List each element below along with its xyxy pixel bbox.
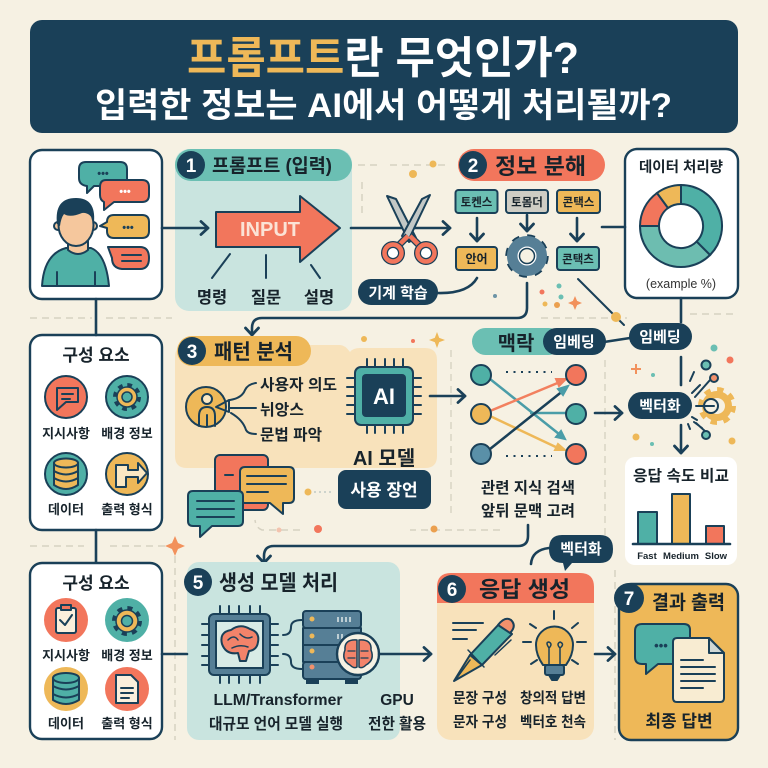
response captions: 창의적 답변	[520, 690, 586, 707]
icon: background gear	[106, 376, 148, 418]
token boxes: 콘택츠	[562, 253, 594, 266]
decorative dashes	[30, 165, 738, 740]
pill: vectorization: 벡터화	[639, 398, 681, 415]
pill: machine learning	[358, 278, 477, 305]
icon: server rack	[283, 611, 361, 684]
arrow: AI chip to network	[430, 395, 465, 397]
donut title: 데이터 처리량	[639, 159, 723, 176]
card labels: 출력 형식	[101, 502, 153, 517]
analysis list: 사용자 의도	[260, 376, 337, 394]
card labels: 데이터	[48, 716, 84, 731]
model caption	[209, 692, 343, 733]
network caption: 관련 지식 검색	[481, 479, 575, 497]
icon: output format	[106, 453, 148, 495]
card labels: 출력 형식	[101, 716, 153, 731]
icon: lightbulb	[523, 611, 586, 680]
decorative dots	[165, 160, 736, 556]
panel: data throughput donut	[625, 149, 738, 298]
pill: context and embedding: 임베딩	[553, 334, 595, 351]
step heading: 결과 출력	[652, 592, 725, 614]
analysis list: 뉘앙스	[260, 401, 304, 419]
header pill	[175, 149, 352, 181]
down arrows	[477, 215, 577, 241]
header band	[437, 573, 594, 603]
icon: AI chip: AI	[373, 384, 395, 409]
chart: response speed	[625, 457, 737, 565]
connectors: left cards	[95, 299, 97, 563]
icon: chat and document	[635, 624, 724, 702]
connector: gear to donut	[602, 226, 625, 228]
icon: chat bubbles	[188, 455, 294, 537]
icon: brain chip	[202, 606, 278, 683]
arrow: vectorization to speed chart	[680, 425, 682, 453]
step heading	[184, 568, 338, 596]
panel: step 7 result	[614, 583, 738, 740]
token boxes: 콘택스	[563, 196, 595, 209]
donut caption: (example %)	[646, 277, 716, 291]
panel: step 1 prompt	[175, 149, 352, 311]
GPU caption: 전한 활용	[368, 715, 426, 733]
icon: yellow speech bubble	[100, 215, 149, 238]
model caption: LLM/Transformer	[214, 692, 342, 709]
arrow: network to generation	[264, 525, 528, 563]
header pill: 프롬프트 (입력)	[212, 155, 332, 177]
result caption: 최종 답변	[645, 712, 713, 731]
card labels: 지시사항	[42, 648, 90, 663]
header pill: 정보 분해	[495, 154, 586, 179]
chart title: 응답 속도 비교	[633, 467, 729, 485]
box: usage scenario: 사용 장언	[350, 481, 418, 500]
response captions: 벡터호 천속	[520, 714, 586, 731]
card title: 구성 요소	[62, 346, 130, 365]
callout: vectorization: 벡터화	[560, 541, 602, 558]
icon: user intent	[186, 383, 256, 434]
icon: data	[45, 453, 87, 495]
card labels: 지시사항	[42, 426, 90, 441]
response captions: 문장 구성	[453, 690, 507, 707]
analysis list: 문법 파악	[260, 426, 322, 444]
arrow: prompt to split	[351, 227, 450, 229]
card labels: 배경 정보	[101, 648, 153, 663]
icon: coral speech bubble	[100, 180, 149, 210]
token boxes: 토몸더	[511, 196, 543, 209]
icon: vector gear	[688, 360, 732, 439]
icon: yellow speech bubble: •••	[122, 222, 134, 234]
panel: step 6 response generation	[437, 573, 594, 740]
panel: user card	[30, 150, 162, 299]
arrow: network to vectorization	[595, 412, 622, 414]
arrow: response to result	[595, 653, 615, 655]
card labels	[42, 426, 153, 517]
card title: 구성 요소	[62, 574, 130, 593]
icon: teal speech bubble: •••	[97, 168, 109, 180]
network links	[490, 379, 568, 450]
AI model label: AI 모델	[353, 447, 415, 470]
panel: components card 1	[30, 335, 162, 530]
icon: coral speech bubble: •••	[119, 186, 131, 198]
box: usage scenario	[338, 470, 431, 509]
pill: embedding right	[629, 323, 692, 350]
title banner	[30, 20, 738, 133]
card labels: 배경 정보	[101, 426, 153, 441]
panel: step 2 split	[456, 149, 605, 274]
pill: embedding right: 임베딩	[639, 329, 681, 346]
response captions: 문자 구성	[453, 714, 507, 731]
callout: vectorization	[531, 535, 613, 571]
panel: components card 2	[30, 563, 162, 739]
icon: scissors	[384, 195, 434, 262]
icon: clipboard	[44, 598, 88, 642]
token boxes: 안어	[465, 252, 488, 266]
icon: instructions	[45, 376, 87, 418]
icon: database	[44, 667, 88, 711]
arrow: generation to response	[379, 653, 431, 655]
step heading: 7	[624, 589, 634, 610]
icon: AI chip	[347, 359, 421, 433]
header band: 6	[447, 580, 457, 601]
chart: neural network: 앞뒤 문맥 고려	[481, 502, 575, 520]
connector: donut to embedding	[680, 298, 682, 322]
input branches: 설명	[304, 288, 334, 307]
network nodes	[471, 365, 586, 464]
title line 2: 입력한 정보는 AI에서 어떻게 처리될까?	[95, 87, 672, 125]
connector: components to generation	[162, 653, 187, 655]
arrow: user to prompt	[162, 227, 208, 229]
header pill	[458, 149, 605, 181]
connector: context to embedding	[578, 279, 624, 325]
title line 1: 프롬프트란 무엇인가?	[187, 34, 579, 83]
input branches: 질문	[251, 288, 281, 307]
arrow: split to pattern analysis	[252, 283, 527, 335]
icon: gear	[509, 238, 545, 274]
response captions	[453, 690, 586, 731]
token boxes: 토켄스	[461, 196, 493, 209]
icon: person	[42, 198, 109, 286]
header pill: 2	[468, 156, 478, 177]
pill: vectorization	[628, 392, 692, 419]
GPU caption: GPU	[380, 692, 414, 709]
step heading: 5	[193, 573, 204, 594]
step heading	[614, 583, 725, 614]
INPUT arrow: INPUT	[240, 219, 300, 241]
pill: machine learning: 기계 학습	[368, 285, 428, 302]
header pill: 3	[187, 342, 197, 363]
card labels: 데이터	[48, 502, 84, 517]
bar labels	[637, 551, 728, 562]
icon: background gear	[105, 598, 149, 642]
icon: pen	[453, 619, 514, 681]
step heading: 생성 모델 처리	[219, 572, 338, 595]
bar labels: Medium	[663, 551, 699, 562]
bars	[638, 494, 724, 544]
panel: step 3 pattern analysis	[175, 336, 437, 470]
model caption: 대규모 언어 모델 실행	[209, 715, 343, 733]
bar labels: Slow	[705, 551, 728, 562]
GPU caption	[368, 692, 426, 733]
decorative dotted link	[276, 488, 438, 533]
donut chart	[640, 185, 722, 267]
panel: step 5 generation model	[184, 562, 400, 740]
token boxes	[456, 190, 600, 270]
INPUT arrow	[216, 196, 340, 262]
input branches	[197, 254, 334, 307]
icon: chat and document: •••	[654, 638, 668, 653]
card labels	[42, 648, 153, 731]
connector: embedding to vectorization	[680, 357, 682, 385]
header band: 응답 생성	[479, 577, 570, 602]
header pill: 1	[186, 156, 197, 177]
header pill: 패턴 분석	[214, 341, 293, 364]
icon: teal speech bubble	[79, 162, 127, 193]
icon: document	[105, 667, 149, 711]
pill: context and embedding: 맥락	[498, 332, 534, 355]
header pill	[177, 336, 311, 366]
analysis list	[260, 376, 337, 444]
input branches: 명령	[197, 288, 227, 307]
pill: context and embedding	[472, 328, 630, 355]
bar labels: Fast	[637, 551, 658, 562]
icon: note bubble	[108, 247, 149, 269]
chart: neural network	[451, 350, 605, 535]
icon: brain badge	[337, 633, 379, 675]
